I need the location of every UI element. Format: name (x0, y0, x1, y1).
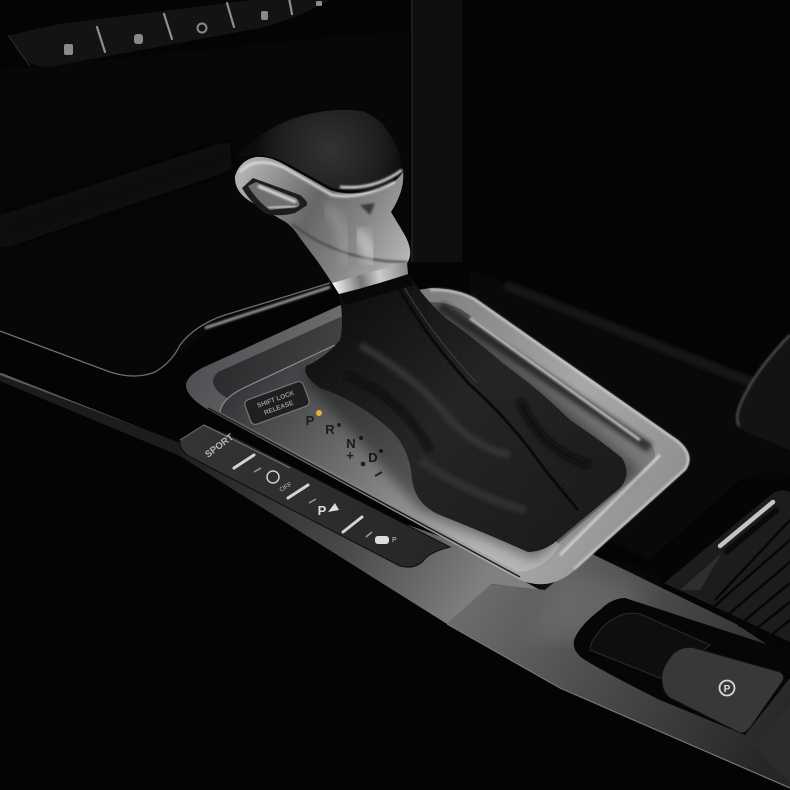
dark upper console surfaces (0, 30, 410, 378)
gear knob metal body (235, 157, 410, 283)
glossy left trim and highlight line (0, 283, 330, 445)
button label: SPORT: SPORT (203, 432, 236, 460)
cup tray (648, 472, 790, 660)
shift lock thumb button (242, 178, 307, 215)
tray ribs (710, 520, 790, 638)
gear position markings: R (325, 422, 335, 437)
icon: parking brake (720, 680, 734, 696)
gear position markings (306, 410, 383, 476)
gear knob details (240, 162, 407, 262)
icon: auto hold off (267, 471, 293, 494)
gear knob leather top (237, 110, 402, 190)
lower glossy panel (447, 553, 790, 788)
icon: auto hold off: OFF (278, 481, 293, 494)
shift lock release button: RELEASE (263, 399, 295, 417)
knob collar (332, 262, 414, 305)
icon: parking sensor (318, 503, 339, 518)
lower silver band (0, 375, 540, 624)
shift lock release button (243, 380, 311, 426)
right side surfaces (470, 270, 790, 560)
parking brake switch (662, 647, 784, 733)
seat edge (737, 335, 790, 450)
seat control button strip (8, 0, 340, 67)
shift lock release button: SHIFT LOCK (256, 390, 296, 410)
gear position markings: N (346, 436, 356, 451)
icon: parking brake: P (724, 684, 731, 695)
shift frame (186, 288, 690, 584)
console button row (180, 425, 450, 567)
gear position markings: D (368, 450, 378, 465)
gear position markings: + (346, 448, 354, 463)
icon: parking assist (375, 536, 397, 544)
selector plate (220, 345, 560, 572)
icon: parking assist: P (392, 537, 397, 544)
indicator: P lamp (316, 410, 322, 416)
icon: parking sensor: P (318, 503, 327, 518)
recess (213, 302, 655, 555)
button separators (234, 455, 362, 532)
leather centre column (412, 0, 464, 262)
parking brake pocket (574, 598, 790, 782)
adjacent switch (756, 706, 790, 782)
gear position markings: P (306, 413, 315, 428)
boot shadow (300, 330, 640, 560)
tray chrome handle (720, 502, 773, 546)
icons: seat controls (64, 1, 322, 55)
leather shift boot (305, 274, 627, 552)
